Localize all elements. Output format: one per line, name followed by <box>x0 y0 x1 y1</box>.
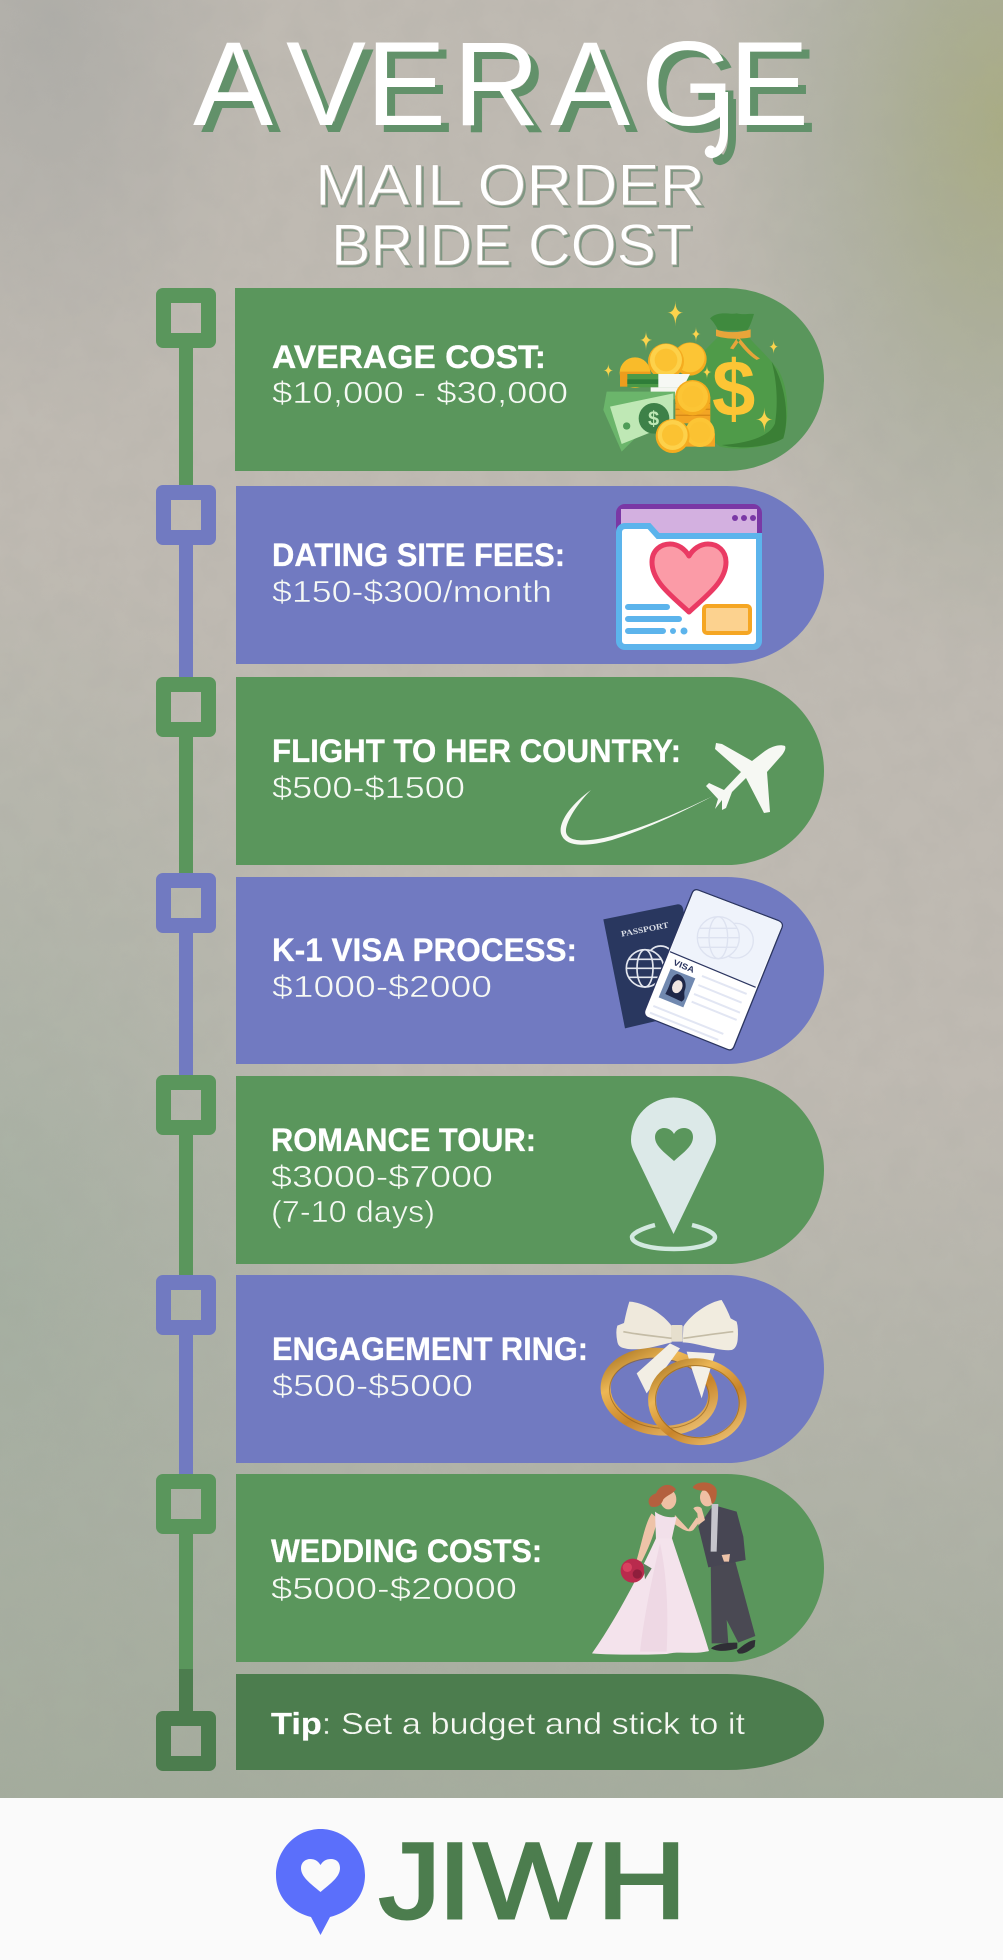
heading: visa: K-1 VISA PROCESS: <box>272 932 577 968</box>
panel: average cost <box>235 288 824 471</box>
heading: romance tour: ROMANCE TOUR: <box>271 1122 536 1158</box>
logo pin icon <box>276 1829 365 1935</box>
node 3 <box>156 677 216 737</box>
panel: wedding costs <box>236 1474 824 1662</box>
icon: passport and visa: VISA <box>672 957 696 975</box>
title word: AVERAGE: AVERAGE <box>193 17 809 151</box>
heading: dating site fees: DATING SITE FEES: <box>272 537 565 573</box>
value: average cost: $10,000 - $30,000 <box>272 375 568 410</box>
heading: flight: FLIGHT TO HER COUNTRY: <box>272 733 681 769</box>
footer band <box>0 1798 1003 1960</box>
icon: passport and visa <box>603 890 782 1050</box>
value: engagement ring: $500-$5000 <box>272 1368 473 1403</box>
logo <box>276 1821 687 1941</box>
node 1 <box>156 288 216 348</box>
panel: tip <box>236 1674 824 1770</box>
title <box>193 17 809 278</box>
node 2 <box>156 485 216 545</box>
icon: website folder with heart <box>616 504 762 647</box>
value: romance tour: $3000-$7000 <box>271 1159 493 1194</box>
panel: engagement ring <box>236 1275 824 1463</box>
value: visa: $1000-$2000 <box>272 969 492 1004</box>
icon: money bag and coins <box>603 301 787 453</box>
duration: romance tour: (7-10 days) <box>271 1194 435 1229</box>
panel: romance tour <box>236 1076 824 1264</box>
node 5 <box>156 1075 216 1135</box>
icon: money bag and coins: $ <box>648 409 659 431</box>
value: dating site fees: $150-$300/month <box>272 574 552 609</box>
panel: dating site fees <box>236 486 824 664</box>
node 8 <box>156 1711 216 1771</box>
panel: visa <box>236 877 824 1064</box>
panel: flight <box>236 677 824 865</box>
subtitle <box>315 153 705 278</box>
timeline <box>156 288 216 1771</box>
tip text: Tip: Set a budget and stick to it <box>271 1706 745 1741</box>
subtitle: BRIDE COST <box>331 213 692 278</box>
value: flight: $500-$1500 <box>272 770 465 805</box>
icon: bride and groom <box>592 1482 755 1655</box>
heading: average cost: AVERAGE COST: <box>272 339 546 375</box>
logo wordmark: JIWH <box>379 1821 687 1941</box>
subtitle: MAIL ORDER <box>315 153 705 218</box>
icon: passport and visa: PASSPORT <box>620 920 670 939</box>
heading: engagement ring: ENGAGEMENT RING: <box>272 1331 588 1367</box>
icon: money bag and coins: $ <box>712 344 755 433</box>
icon: airplane with swoosh <box>561 743 785 845</box>
node 7 <box>156 1474 216 1534</box>
icon: wedding rings with bow <box>600 1300 748 1447</box>
node 6 <box>156 1275 216 1335</box>
value: wedding costs: $5000-$20000 <box>271 1571 517 1606</box>
node 4 <box>156 873 216 933</box>
icon: location pin with heart <box>631 1098 716 1249</box>
heading: wedding costs: WEDDING COSTS: <box>271 1533 542 1569</box>
